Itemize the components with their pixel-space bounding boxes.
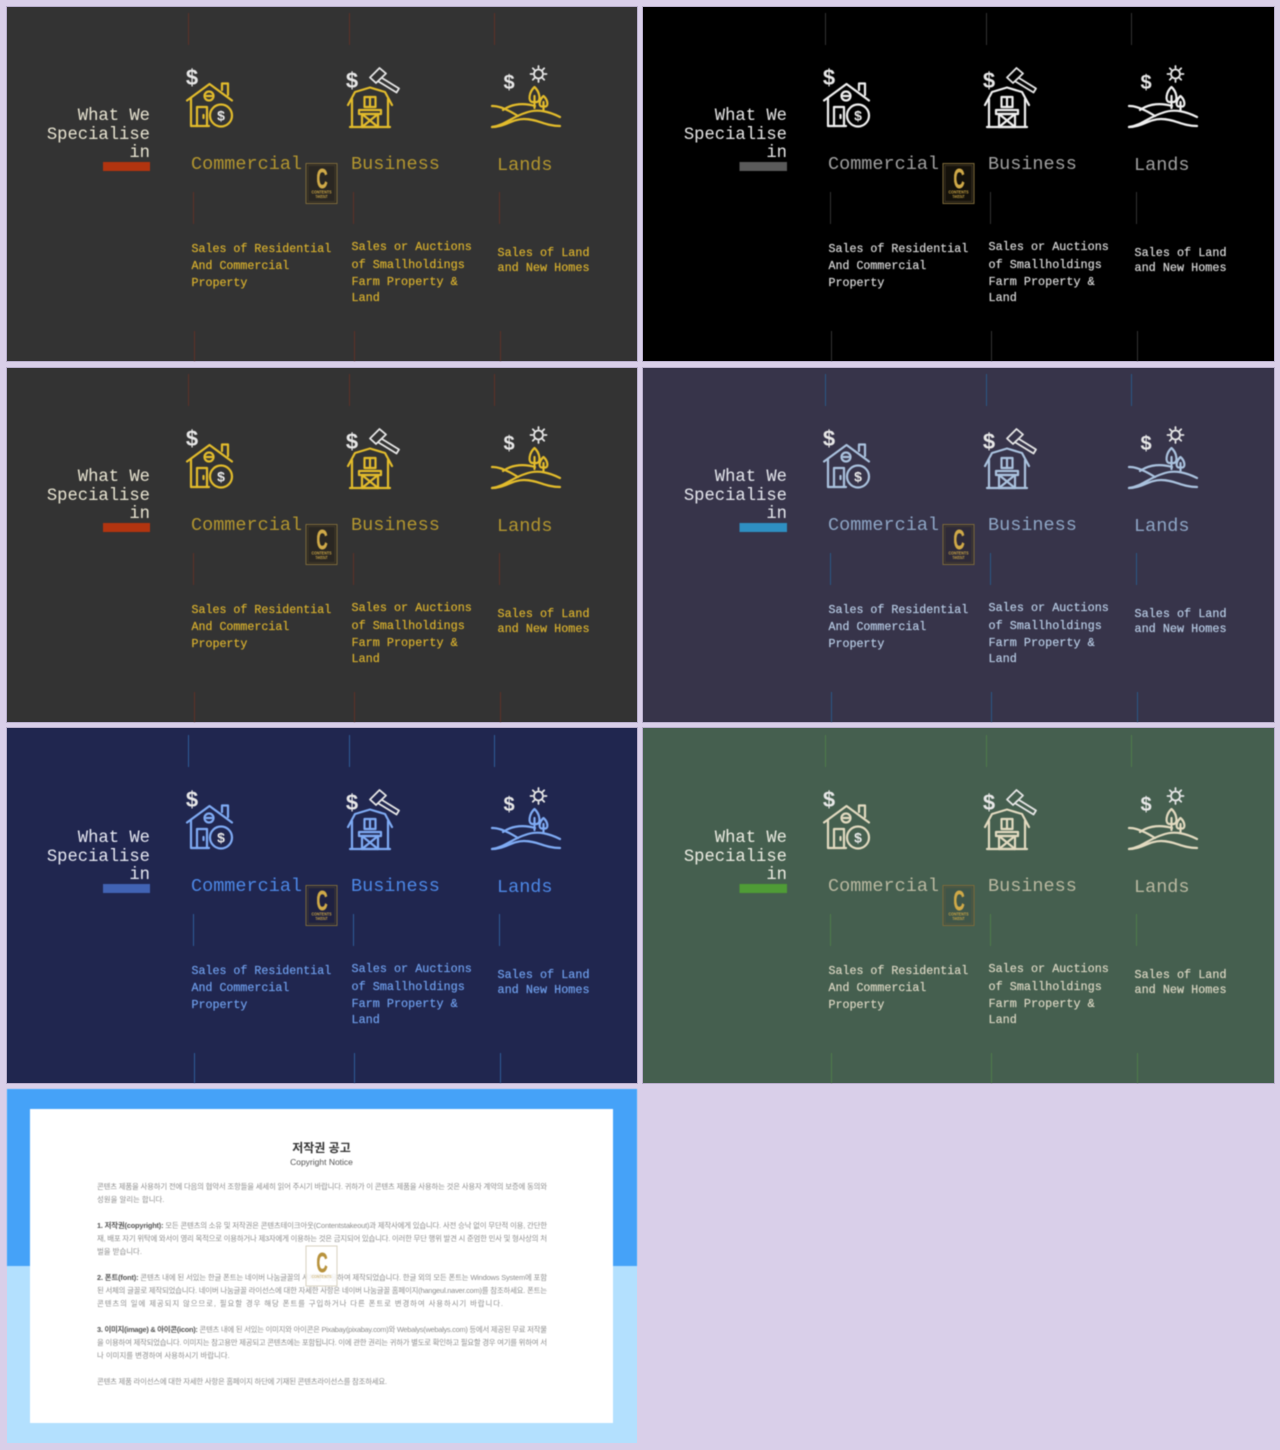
paragraph 3: images and icons: 을 이용하여 제작되었습니다. 이미지는 참고용만 제공되고 콘텐츠에는 포함됩니다. 이에 관한 권리는 귀하가 별도로 확인하고 필요할 경우 여기를 위하여 서 <box>97 1338 547 1347</box>
text: business description: Farm Property & <box>988 275 1095 289</box>
logo badge: C <box>953 163 965 194</box>
heading: What We Specialise in: in <box>129 505 150 524</box>
text: business description <box>352 240 472 305</box>
icon: house with dollar coin <box>186 426 232 488</box>
logo badge: C <box>953 885 965 916</box>
column heading: Commercial: Commercial <box>191 876 302 897</box>
top divider lines <box>826 13 1132 45</box>
icon: house with dollar coin: $ <box>186 426 198 451</box>
column heading: Business: Business <box>988 876 1077 897</box>
text: commercial description: And Commercial <box>192 260 289 273</box>
text: business description: of Smallholdings <box>352 619 465 633</box>
heading: What We Specialise in: What We <box>715 829 787 848</box>
logo badge: C <box>316 163 328 194</box>
heading: What We Specialise in: in <box>129 144 150 163</box>
text: business description: Land <box>352 1013 380 1027</box>
text: lands description <box>498 246 590 275</box>
panel: charcoal and gold variation, top left <box>7 7 637 361</box>
logo badge: TAKEOUT <box>952 194 965 199</box>
icon: house with dollar coin: $ <box>186 787 198 812</box>
heading accent bar <box>740 162 787 171</box>
blue upper background band <box>7 1089 637 1266</box>
text: business description: of Smallholdings <box>988 258 1102 272</box>
text: commercial description: Property <box>828 638 884 651</box>
icon: house with dollar coin <box>823 426 869 488</box>
panel: slate and pale blue variation, second row right <box>643 368 1274 722</box>
paragraph 3: images and icons: 나 이미지를 변경하여 사용하시기 바랍니다. <box>97 1351 230 1360</box>
top divider lines <box>826 735 1132 767</box>
column heading: Lands: Lands <box>1134 877 1190 898</box>
paragraph 1: copyright: 1. 저작권(copyright): 모든 콘텐츠의 소유 및 저작권은 콘텐츠테이크아웃(Contentstakeout)과 제작사에게 있습니다. 사전 승낙 없이 무단적 이용, 간단한 <box>97 1221 547 1230</box>
logo badge <box>943 524 974 564</box>
logo badge: CONTENTS <box>948 912 969 916</box>
logo badge: C <box>953 524 965 555</box>
column heading: Business: Business <box>351 876 440 897</box>
logo badge: CONTENTS <box>312 190 332 194</box>
heading: What We Specialise in: Specialise <box>47 126 150 145</box>
text: commercial description <box>828 604 968 651</box>
text: business description: Sales or Auctions <box>352 240 472 254</box>
middle divider lines <box>194 914 500 946</box>
text: commercial description <box>192 243 331 290</box>
heading: What We Specialise in: What We <box>78 468 150 487</box>
logo badge: C <box>316 885 328 916</box>
icon: land with trees and sun <box>492 66 560 127</box>
white notice card <box>30 1109 613 1423</box>
bottom divider lines <box>194 692 500 722</box>
text: business description: of Smallholdings <box>988 619 1102 633</box>
heading: What We Specialise in: Specialise <box>47 487 150 506</box>
heading: What We Specialise in: What We <box>78 829 150 848</box>
intro paragraph: 성원을 알리는 합니다. <box>97 1195 164 1204</box>
text: business description <box>352 962 472 1027</box>
text: business description: Farm Property & <box>988 636 1095 650</box>
logo badge: TAKEOUT <box>316 194 328 199</box>
logo badge: TAKEOUT <box>316 555 328 560</box>
text: commercial description: And Commercial <box>828 260 926 273</box>
top divider lines <box>188 13 494 45</box>
icon: land with trees and sun <box>1129 788 1197 849</box>
logo badge <box>306 885 337 926</box>
text: lands description: and New Homes <box>498 622 590 636</box>
column heading: Lands: Lands <box>497 155 553 176</box>
icon: house with dollar coin: $ <box>186 65 198 90</box>
text: business description: Land <box>988 1013 1017 1027</box>
text: commercial description: Property <box>192 277 247 290</box>
logo badge: TAKEOUT <box>952 555 965 560</box>
middle divider lines <box>194 192 500 224</box>
middle divider lines <box>194 553 500 585</box>
column heading: Business: Business <box>351 154 440 175</box>
logo badge: C <box>316 1247 328 1278</box>
heading accent bar <box>103 884 150 893</box>
text: business description: Sales or Auctions <box>988 240 1109 254</box>
top divider lines <box>188 374 494 406</box>
icon: house with dollar coin: $ <box>854 468 862 484</box>
text: business description: Sales or Auctions <box>988 962 1109 976</box>
logo badge <box>306 1246 337 1286</box>
bottom divider lines <box>194 331 500 361</box>
column heading: Commercial: Commercial <box>828 876 939 897</box>
closing line: 콘텐츠 제품 라이선스에 대한 자세한 사항은 홈페이지 하단에 기재된 콘텐츠라이선스를 참조하세요. <box>97 1377 387 1386</box>
heading: What We Specialise in: in <box>766 144 787 163</box>
text: lands description: Sales of Land <box>1134 246 1227 260</box>
text: business description: Land <box>352 291 380 305</box>
text: commercial description: Property <box>192 638 247 651</box>
intro paragraph: 콘텐츠 제품을 사용하기 전에 다음의 협약서 조항들을 세세히 읽어 주시기 바랍니다. 귀하가 이 콘텐츠 제품을 사용하는 것은 사용자 계약의 보증에 동의와 <box>97 1182 547 1191</box>
icon: house with dollar coin: $ <box>217 468 225 484</box>
logo badge: TAKEOUT <box>952 916 965 921</box>
heading: What We Specialise in: Specialise <box>47 848 150 867</box>
heading: What We Specialise in: Specialise <box>684 126 787 145</box>
text: business description: Land <box>988 291 1017 305</box>
icon: barn with gavel: $ <box>983 429 995 454</box>
heading: What We Specialise in <box>47 107 150 163</box>
icon: barn with gavel <box>346 429 399 488</box>
icon: land with trees and sun: $ <box>503 433 515 455</box>
icon: land with trees and sun: $ <box>503 72 515 94</box>
text: business description <box>352 601 472 666</box>
text: lands description: Sales of Land <box>1134 607 1227 621</box>
icon: barn with gavel <box>346 790 399 849</box>
heading: What We Specialise in: in <box>766 505 787 524</box>
column heading: Lands: Lands <box>497 516 553 537</box>
bottom divider lines <box>832 331 1138 361</box>
icon: land with trees and sun <box>1129 66 1197 127</box>
text: commercial description <box>192 604 331 651</box>
text: commercial description: And Commercial <box>828 982 926 995</box>
paragraph 3: images and icons: 3. 이미지(image) & 아이콘(icon): 콘텐츠 내에 된 서있는 이미지와 아이콘은 Pixabay(pixabay.com)와 Webalys(webalys.com) 등에서 제공된 무료 저작물 <box>97 1325 547 1334</box>
heading accent bar <box>740 884 787 893</box>
text: business description: Sales or Auctions <box>352 601 472 615</box>
middle divider lines <box>830 192 1136 224</box>
text: commercial description: And Commercial <box>828 621 926 634</box>
notice subtitle: Copyright Notice <box>290 1157 353 1167</box>
logo badge: CONTENTS <box>312 550 332 556</box>
icon: barn with gavel: $ <box>346 68 358 93</box>
text: commercial description: And Commercial <box>192 621 289 634</box>
logo badge: C <box>316 524 328 555</box>
column heading: Commercial: Commercial <box>828 515 939 536</box>
column heading: Commercial: Commercial <box>828 154 939 175</box>
panel: copyright notice <box>7 1089 637 1443</box>
heading: What We Specialise in <box>47 829 150 885</box>
icon: land with trees and sun <box>492 788 560 849</box>
icon: barn with gavel: $ <box>983 68 995 93</box>
icon: land with trees and sun: $ <box>1140 72 1152 94</box>
text: business description: Farm Property & <box>352 997 458 1011</box>
text: lands description <box>1134 607 1227 636</box>
icon: house with dollar coin: $ <box>217 108 225 124</box>
text: commercial description <box>192 965 331 1012</box>
icon: house with dollar coin <box>823 787 869 848</box>
text: business description: of Smallholdings <box>352 258 465 272</box>
text: business description: Farm Property & <box>988 997 1095 1011</box>
icon: house with dollar coin: $ <box>823 426 835 451</box>
paragraph 1: copyright: 재, 배포 자기 위탁에 와서이 영리 목적으로 이용하거나 제3자에게 이용하는 것은 금지되어 있습니다. 이러한 무단 행위 발견 시 준엄한 민사 및 형사상의 처 <box>97 1234 547 1243</box>
text: lands description <box>1134 246 1227 275</box>
heading: What We Specialise in: What We <box>78 107 150 126</box>
text: lands description <box>1134 968 1227 997</box>
heading: What We Specialise in <box>684 829 787 885</box>
paragraph 2: fonts: 된 서체의 글꼴로 제작되었습니다. 네이버 나눔글꼴 라이선스에 대한 자세한 사항은 네이버 나눔글꼴 홈페이지(hangeul.naver.com)를 참조하세요. 폰트는 <box>97 1286 547 1295</box>
bottom divider lines <box>832 692 1138 722</box>
text: business description <box>988 240 1109 305</box>
heading accent bar <box>740 523 787 532</box>
icon: land with trees and sun: $ <box>1140 433 1152 455</box>
text: commercial description: Sales of Residential <box>828 604 968 617</box>
text: commercial description: Sales of Residential <box>192 604 331 617</box>
heading: What We Specialise in: What We <box>715 468 787 487</box>
logo badge: TAKEOUT <box>316 916 328 921</box>
text: lands description: Sales of Land <box>498 246 590 260</box>
column heading: Lands: Lands <box>1134 516 1190 537</box>
text: business description: of Smallholdings <box>352 980 465 994</box>
icon: house with dollar coin <box>823 65 869 126</box>
text: commercial description <box>828 243 968 290</box>
text: lands description: Sales of Land <box>498 607 590 621</box>
heading: What We Specialise in: Specialise <box>684 848 787 867</box>
icon: barn with gavel: $ <box>346 790 358 815</box>
text: business description: Farm Property & <box>352 636 458 650</box>
icon: land with trees and sun: $ <box>1140 794 1152 816</box>
middle divider lines <box>830 914 1136 946</box>
icon: barn with gavel: $ <box>346 429 358 454</box>
bottom divider lines <box>194 1053 500 1083</box>
paragraph 3: images and icons <box>97 1325 547 1360</box>
heading: What We Specialise in <box>684 107 787 163</box>
logo badge: CONTENTS <box>312 1274 332 1279</box>
icon: house with dollar coin <box>186 65 232 126</box>
text: commercial description: Sales of Residential <box>828 965 968 978</box>
icon: house with dollar coin: $ <box>823 65 835 90</box>
logo badge <box>943 885 974 926</box>
paragraph 2: fonts: 2. 폰트(font): 콘텐츠 내에 된 서있는 한글 폰트는 네이버 나눔글꼴의 서체를 사용하여 제작되었습니다. 한글 외의 모든 폰트는 Windows System에 포함 <box>97 1273 547 1282</box>
text: lands description: and New Homes <box>498 261 590 275</box>
column heading: Business: Business <box>988 154 1077 175</box>
text: lands description: Sales of Land <box>498 968 590 982</box>
panel: navy and blue variation, third row left <box>7 728 637 1083</box>
icon: house with dollar coin: $ <box>854 830 862 846</box>
icon: barn with gavel <box>983 790 1036 849</box>
logo badge: CONTENTS <box>312 912 332 916</box>
paragraph 1: copyright: 벌을 받습니다. <box>97 1247 142 1256</box>
text: business description: Sales or Auctions <box>352 962 472 976</box>
logo badge: CONTENTS <box>948 190 969 194</box>
top divider lines <box>188 735 494 767</box>
icon: house with dollar coin: $ <box>854 108 862 124</box>
icon: barn with gavel: $ <box>983 790 995 815</box>
text: lands description: and New Homes <box>1134 622 1227 636</box>
column heading: Commercial: Commercial <box>191 154 302 175</box>
icon: barn with gavel <box>346 68 399 127</box>
top divider lines <box>826 374 1132 406</box>
text: business description: Land <box>352 652 380 666</box>
text: commercial description: Sales of Residential <box>192 243 331 256</box>
heading: What We Specialise in <box>47 468 150 524</box>
logo badge <box>943 163 974 204</box>
text: business description: Land <box>988 652 1017 666</box>
logo badge: CONTENTS <box>948 550 969 556</box>
column heading: Lands: Lands <box>1134 155 1190 176</box>
panel: black and white variation, top right <box>643 7 1274 361</box>
heading accent bar <box>103 523 150 532</box>
text: lands description <box>498 968 590 997</box>
notice title: 저작권 공고 <box>292 1140 351 1155</box>
text: business description: of Smallholdings <box>988 980 1102 994</box>
text: business description: Sales or Auctions <box>988 601 1109 615</box>
heading accent bar <box>103 162 150 171</box>
middle divider lines <box>830 553 1136 585</box>
text: business description <box>988 601 1109 666</box>
panel: charcoal and gold variation, second row left <box>7 368 637 722</box>
column heading: Business: Business <box>351 515 440 536</box>
panel: forest green and cream variation, third row right <box>643 728 1274 1083</box>
text: commercial description <box>828 965 968 1012</box>
text: lands description <box>498 607 590 636</box>
heading: What We Specialise in: in <box>766 866 787 885</box>
text: commercial description: Sales of Residential <box>192 965 331 978</box>
logo badge <box>306 524 337 564</box>
logo badge <box>306 163 337 204</box>
text: business description <box>988 962 1109 1027</box>
heading: What We Specialise in <box>684 468 787 524</box>
column heading: Business: Business <box>988 515 1077 536</box>
text: commercial description: Property <box>828 999 884 1012</box>
icon: barn with gavel <box>983 429 1036 488</box>
icon: barn with gavel <box>983 68 1036 127</box>
text: lands description: and New Homes <box>1134 983 1227 997</box>
icon: house with dollar coin: $ <box>217 830 225 846</box>
text: lands description: and New Homes <box>1134 261 1227 275</box>
text: commercial description: Property <box>828 277 884 290</box>
text: commercial description: And Commercial <box>192 982 289 995</box>
paragraph 2: fonts: 콘텐츠의 일에 제공되지 않으므로, 필요할 경우 해당 폰트를 구입하거나 다른 폰트로 변경하여 사용하시기 바랍니다. <box>97 1299 503 1308</box>
column heading: Lands: Lands <box>497 877 553 898</box>
heading: What We Specialise in: in <box>129 866 150 885</box>
intro paragraph <box>97 1182 547 1204</box>
icon: land with trees and sun <box>492 427 560 488</box>
icon: land with trees and sun <box>1129 427 1197 488</box>
text: commercial description: Sales of Residential <box>828 243 968 256</box>
column heading: Commercial: Commercial <box>191 515 302 536</box>
bottom divider lines <box>832 1053 1138 1083</box>
text: business description: Farm Property & <box>352 275 458 289</box>
heading: What We Specialise in: Specialise <box>684 487 787 506</box>
paragraph 1: copyright <box>97 1221 547 1256</box>
text: commercial description: Property <box>192 999 247 1012</box>
icon: house with dollar coin <box>186 787 232 848</box>
text: lands description: and New Homes <box>498 983 590 997</box>
icon: land with trees and sun: $ <box>503 794 515 816</box>
icon: house with dollar coin: $ <box>823 787 835 812</box>
paragraph 2: fonts <box>97 1273 547 1308</box>
text: lands description: Sales of Land <box>1134 968 1227 982</box>
heading: What We Specialise in: What We <box>715 107 787 126</box>
